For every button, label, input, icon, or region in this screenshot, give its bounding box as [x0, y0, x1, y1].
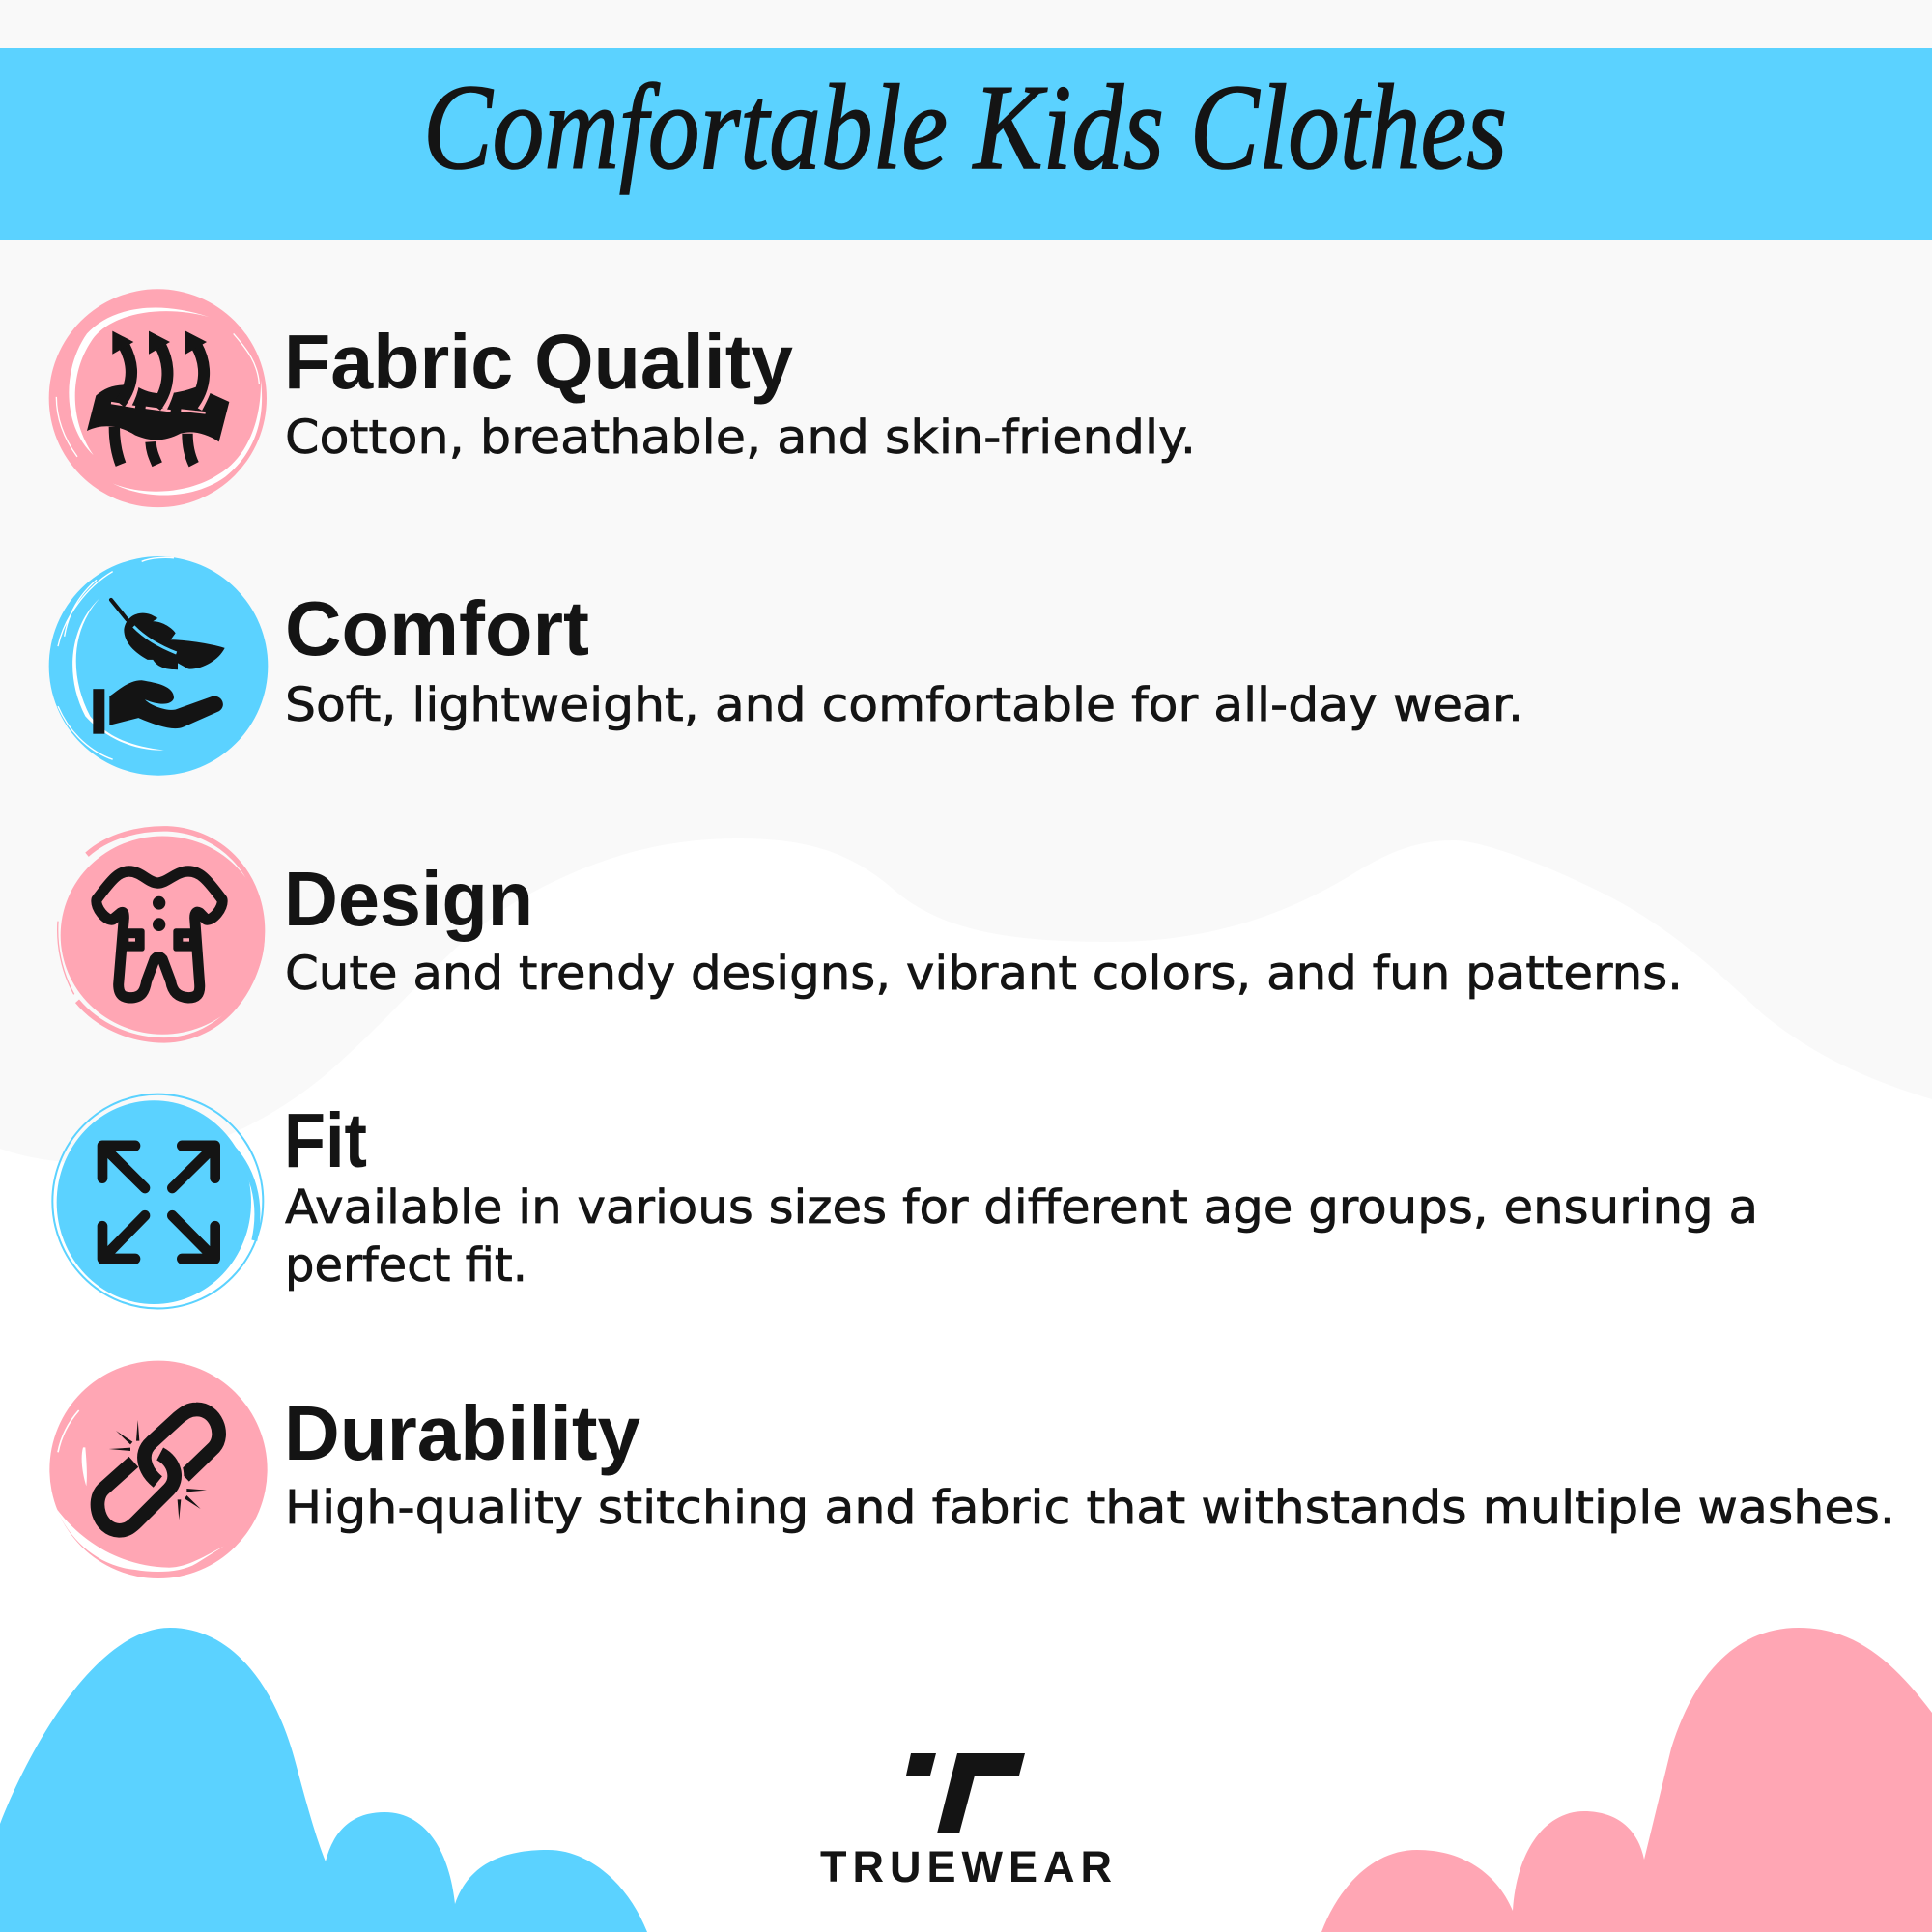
background wave [0, 0, 1932, 1164]
row: fabric quality [49, 289, 1196, 507]
row: fit [52, 1094, 1758, 1308]
logo wordmark: TRUEWEAR [820, 1842, 1112, 1891]
row: durability [49, 1361, 1895, 1578]
row: design [58, 829, 1683, 1040]
title band [0, 48, 1932, 240]
description: Available in various sizes for different age groups, ensuring a [285, 1180, 1758, 1235]
description: Soft, lightweight, and comfortable for all-day wear. [285, 678, 1523, 732]
heading: Design [284, 856, 533, 942]
blue hills [0, 1628, 647, 1932]
heading: Fit [284, 1097, 367, 1183]
description [285, 1180, 1758, 1293]
icon: expanding arrows [52, 1094, 263, 1308]
heading: Fabric Quality [284, 319, 793, 405]
description: Cotton, breathable, and skin-friendly. [285, 411, 1196, 465]
pink hills [1321, 1628, 1932, 1932]
logo: TRUEWEAR [820, 1753, 1112, 1891]
title: Comfortable Kids Clothes [423, 61, 1507, 195]
logo mark [906, 1753, 1025, 1833]
icon: fabric with rising arrows [49, 289, 267, 507]
description: Cute and trendy designs, vibrant colors, and fun patterns. [285, 947, 1683, 1001]
icon: baby romper [58, 829, 265, 1040]
heading: Durability [284, 1390, 641, 1476]
icon: chain link [49, 1361, 268, 1578]
description: High-quality stitching and fabric that withstands multiple washes. [285, 1481, 1895, 1535]
heading: Comfort [285, 585, 589, 671]
description: perfect fit. [285, 1238, 527, 1293]
icon: feather over hand [49, 556, 268, 776]
row: comfort [49, 556, 1523, 776]
